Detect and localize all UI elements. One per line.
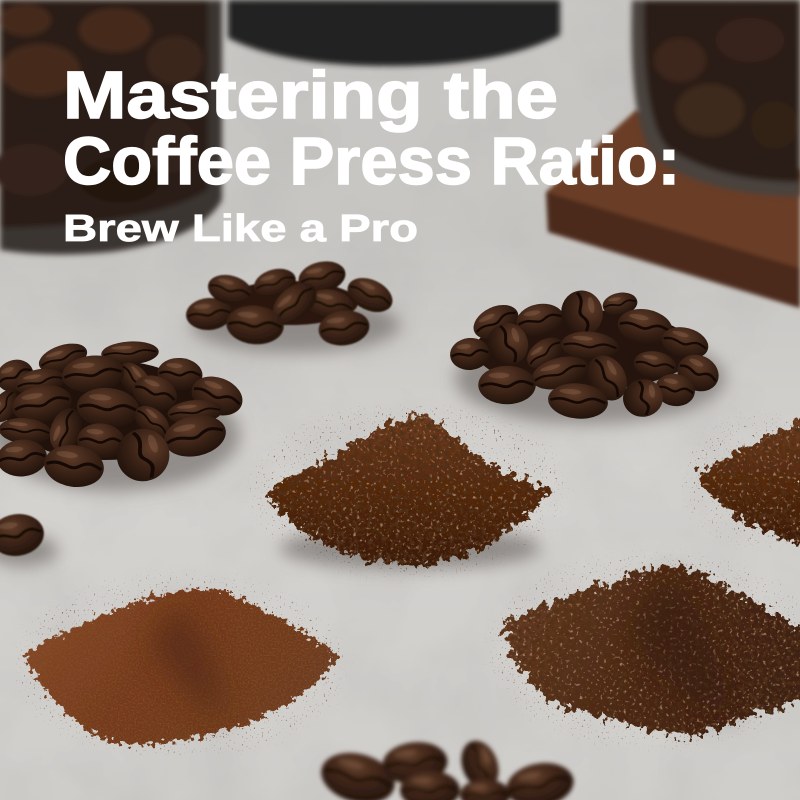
scattered grounds around piles bbox=[15, 405, 800, 755]
title bbox=[63, 58, 680, 250]
title: Mastering the bbox=[63, 58, 558, 133]
coarse grounds pile: right edge bbox=[698, 418, 800, 545]
blurred dark canister, top centre bbox=[228, 0, 560, 66]
title: Coffee Press Ratio: bbox=[63, 124, 680, 199]
subtitle: Brew Like a Pro bbox=[63, 208, 418, 250]
bean cluster: bottom centre bbox=[316, 735, 577, 800]
wooden block, top right bbox=[546, 110, 800, 308]
blurred glass jar, top right bbox=[632, 0, 800, 196]
soft shadows under beans and piles bbox=[0, 297, 725, 570]
fine grounds pile: bottom left bbox=[24, 589, 338, 744]
bean cluster: top centre bbox=[185, 257, 398, 349]
blurred glass jar, top left bbox=[0, 0, 222, 255]
medium grounds pile: bottom right bbox=[503, 566, 800, 738]
single bean bbox=[0, 511, 47, 559]
bean cluster: top right bbox=[449, 287, 725, 421]
bean cluster: left bbox=[0, 338, 248, 491]
coarse grounds pile: centre bbox=[268, 412, 552, 565]
